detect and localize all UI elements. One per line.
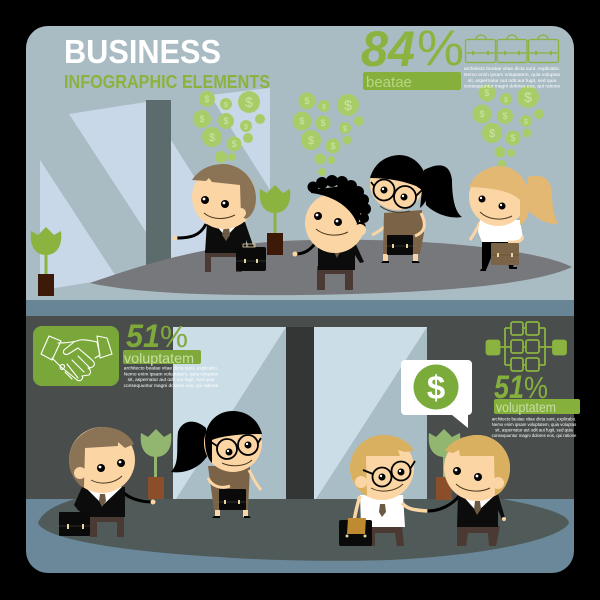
stat: 51 percent left: 51 bbox=[126, 318, 160, 354]
text block: top right: sit, aspernatur aut odit aut fugit, sed quia bbox=[468, 78, 556, 84]
text block: bottom right: architecto beatae vitae dicta sunt, explicabo. bbox=[492, 416, 576, 422]
bottom room floor bbox=[38, 499, 569, 561]
coins: woman: $ bbox=[502, 111, 508, 121]
coins: woman: $ bbox=[484, 88, 490, 98]
coins: first man: $ bbox=[223, 116, 229, 126]
character: man with plant bbox=[59, 427, 156, 537]
speech bubble with dollar: $ bbox=[427, 369, 445, 406]
stat: 84 percent bbox=[361, 20, 464, 91]
text block: top right bbox=[464, 66, 561, 90]
coins: second man: $ bbox=[308, 135, 314, 147]
top room windows bbox=[40, 88, 270, 290]
plant: left top bbox=[31, 227, 61, 296]
stat: 84 percent: beatae bbox=[366, 74, 412, 91]
coins: second man: $ bbox=[343, 126, 347, 133]
coins: woman: $ bbox=[524, 119, 528, 126]
text block: top right: consequuntur magni dolores eos, qui ratione bbox=[464, 84, 561, 90]
stat: 51 percent right bbox=[494, 369, 580, 415]
coins: woman bbox=[472, 84, 544, 168]
text block: bottom right: sit, aspernatur aut odit aut fugit, sed quia bbox=[495, 428, 573, 432]
coins: first man bbox=[193, 91, 265, 174]
character: blonde woman bbox=[469, 166, 558, 271]
stat: 51 percent left: voluptatem bbox=[124, 350, 194, 366]
speech bubble with dollar bbox=[401, 360, 472, 428]
coins: first man: $ bbox=[244, 124, 248, 131]
coins: second man: $ bbox=[344, 97, 352, 113]
coins: first man: $ bbox=[245, 94, 253, 110]
stat: 51 percent left: % bbox=[160, 319, 188, 354]
panel: handshake icon bbox=[33, 326, 119, 386]
text block: bottom left bbox=[124, 366, 219, 389]
character: man with curly black hair bbox=[292, 175, 371, 290]
text block: top right: architecto beatae vitae dicta sunt, explicabo. bbox=[464, 66, 560, 72]
coins: second man: $ bbox=[304, 96, 310, 106]
coins: woman: $ bbox=[479, 109, 485, 119]
icon: flowchart bbox=[486, 322, 566, 371]
coins: second man: $ bbox=[322, 104, 326, 111]
text block: bottom right: consequuntur magni dolores eos, qui ratione bbox=[492, 433, 577, 438]
coins: first man: $ bbox=[204, 94, 210, 104]
coins: second man bbox=[292, 92, 364, 176]
stat: 51 percent right: 51 bbox=[494, 369, 524, 405]
bottom room windows bbox=[173, 327, 427, 499]
coins: first man: $ bbox=[209, 132, 215, 144]
character: blond man with glasses, shaking hands bbox=[339, 435, 427, 546]
stat: 51 percent right: % bbox=[524, 370, 548, 405]
subtitle: INFOGRAPHIC ELEMENTS bbox=[64, 72, 270, 92]
stat: 51 percent left bbox=[123, 318, 201, 366]
text block: bottom right: Nemo enim ipsam voluptatem, quia voluptas bbox=[492, 422, 576, 427]
plant: bottom right bbox=[429, 429, 460, 500]
text block: bottom left: Nemo enim ipsam voluptatem, quia voluptas bbox=[124, 372, 219, 378]
text block: bottom left: sit, aspernatur aut odit aut fugit, sed quia bbox=[128, 377, 215, 383]
character: woman with ponytail bottom bbox=[171, 411, 262, 518]
coins: woman: $ bbox=[489, 128, 495, 140]
coins: first man: $ bbox=[224, 102, 228, 109]
text block: top right: Nemo enim ipsam voluptatem, quia voluptas bbox=[464, 72, 561, 78]
plant: right of first man bbox=[260, 185, 290, 255]
stat: 84 percent: 84 bbox=[361, 21, 415, 77]
coins: woman: $ bbox=[510, 133, 516, 143]
character: blond man in suit, shaking hands bbox=[428, 435, 510, 546]
text block: bottom left: architecto beatae vitae dicta sunt, explicabo. bbox=[124, 366, 218, 372]
top room floor bbox=[90, 240, 572, 295]
text block: bottom left: consequuntur magni dolores eos, qui ratione bbox=[124, 383, 219, 389]
coins: first man: $ bbox=[231, 139, 237, 149]
coins: woman: $ bbox=[524, 89, 532, 105]
icon: three briefcases bbox=[466, 35, 558, 62]
character: man with coins, brown hair bbox=[172, 164, 266, 272]
coins: second man: $ bbox=[330, 141, 336, 151]
coins: second man: $ bbox=[320, 118, 326, 128]
title: BUSINESS bbox=[64, 33, 221, 70]
stat: 51 percent right: voluptatem bbox=[496, 400, 556, 415]
plant: bottom left bbox=[141, 429, 171, 499]
stat: 84 percent: % bbox=[417, 20, 464, 76]
text block: bottom right bbox=[492, 416, 577, 438]
coins: first man: $ bbox=[199, 114, 205, 124]
coins: second man: $ bbox=[299, 116, 305, 126]
character: woman with black ponytail bbox=[370, 155, 462, 263]
coins: woman: $ bbox=[504, 97, 508, 104]
